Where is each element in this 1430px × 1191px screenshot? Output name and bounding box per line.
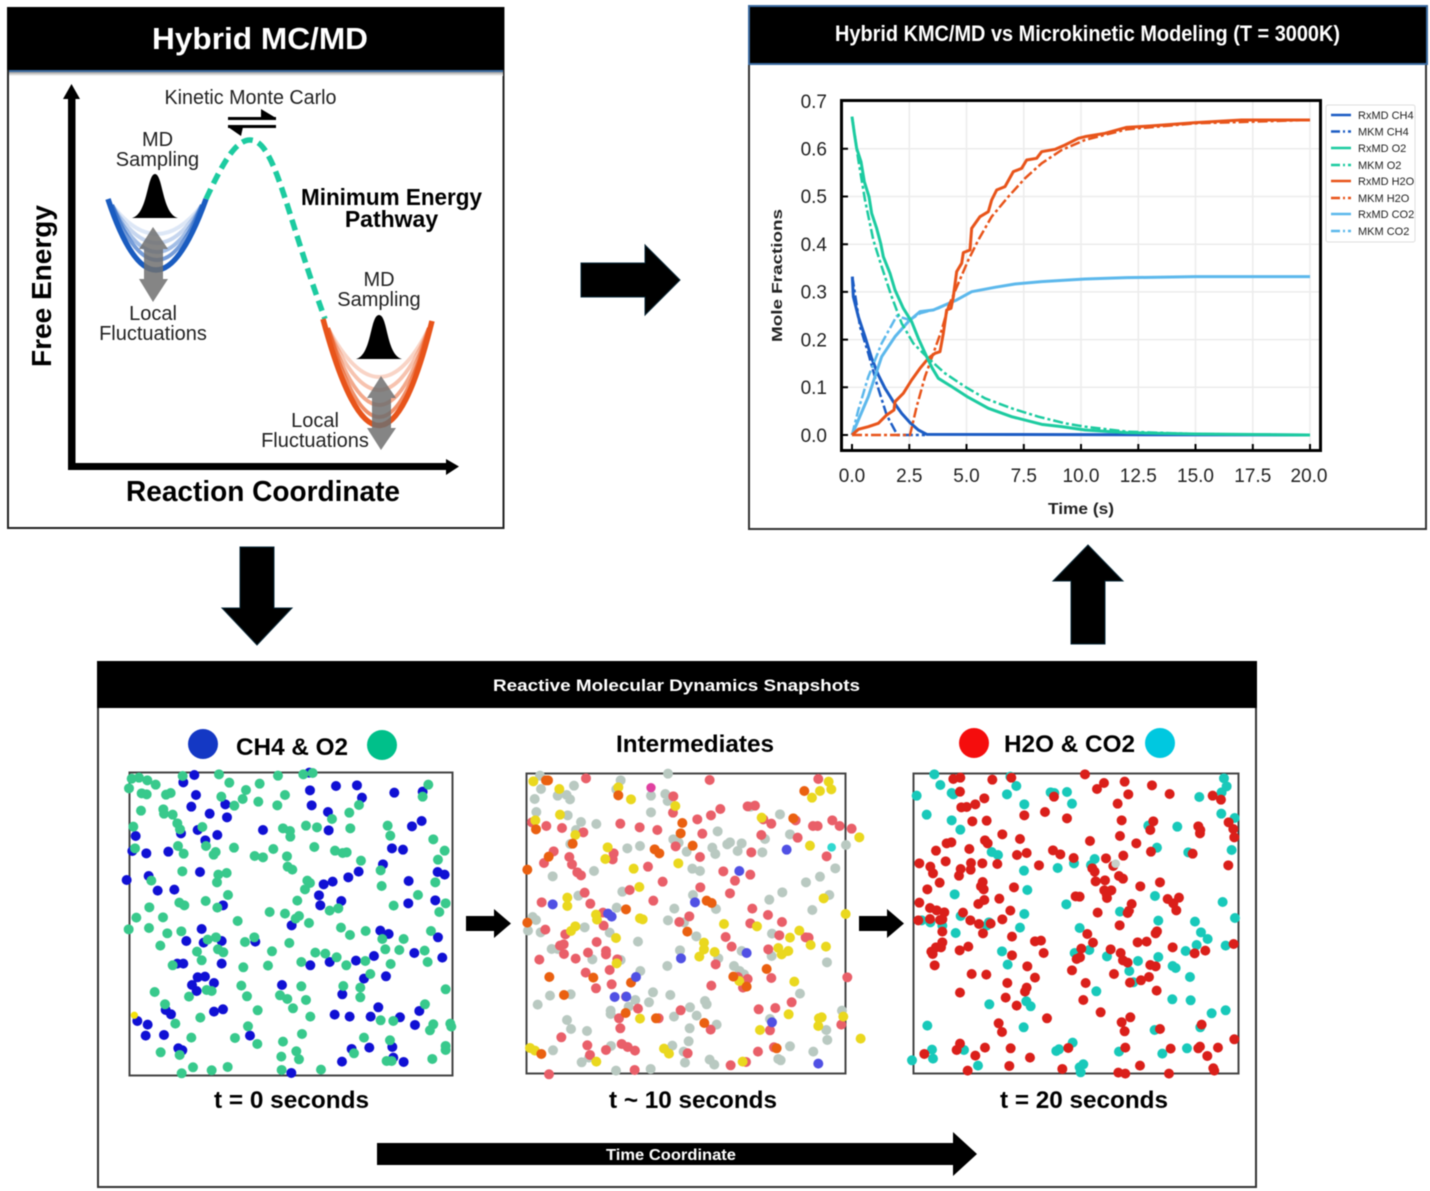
icon: MD sampling distribution right (356, 315, 402, 359)
heading bar: chart title: Hybrid KMC/MD vs Microkinetic Modeling (T = 3000K) (835, 21, 1340, 46)
chart legend: RxMD H2O (1358, 176, 1415, 188)
label: MD Sampling right (337, 269, 421, 311)
heading bar: snapshots title: Reactive Molecular Dynamics Snapshots (493, 676, 860, 695)
arrow: up to chart (1053, 545, 1123, 644)
label: MD Sampling right: MD (363, 269, 395, 291)
x-axis tick labels: 15.0 (1177, 466, 1214, 487)
label: Minimum Energy Pathway: Pathway (345, 206, 438, 232)
label: Local Fluctuations right: Fluctuations (261, 430, 369, 452)
x-axis tick labels: 2.5 (896, 466, 923, 487)
arrow: Time Coordinate (377, 1132, 977, 1176)
heading bar: Hybrid MC/MD: Hybrid MC/MD (152, 21, 368, 56)
axis label: Free Energy: Free Energy (26, 205, 57, 367)
heading bar: chart title (749, 6, 1427, 64)
y-axis tick labels: 0.4 (801, 235, 827, 256)
chart legend: MKM O2 (1358, 160, 1401, 172)
y-axis tick labels: 0.7 (801, 92, 827, 113)
arrow: down to snapshots (222, 547, 292, 645)
chart legend: RxMD O2 (1358, 143, 1406, 155)
y-axis tick labels: 0.0 (801, 426, 827, 447)
label: Local Fluctuations right (261, 410, 369, 452)
icon: gray fluctuation arrow right (367, 376, 396, 450)
legend: CH4 & O2 (188, 729, 397, 761)
x-axis tick labels: 7.5 (1011, 466, 1037, 487)
legend: H2O & CO2: H2O & CO2 (1004, 731, 1135, 758)
heading bar: Hybrid MC/MD (7, 7, 504, 70)
caption: t = 0 seconds: t = 0 seconds (214, 1087, 369, 1114)
icon: equilibrium arrows (228, 109, 276, 136)
x-axis tick labels: 5.0 (953, 466, 980, 487)
axis: free energy arrow (63, 84, 80, 470)
chart legend: RxMD CH4 (1358, 110, 1414, 122)
snapshot: t = 0 seconds, CH4 and O2 molecules (127, 772, 452, 1076)
heading: Intermediates: Intermediates (616, 731, 774, 758)
chart legend (1326, 105, 1415, 242)
x-axis tick labels: 17.5 (1234, 466, 1271, 487)
label: MD Sampling left: Sampling (116, 149, 199, 171)
y-axis tick labels: 0.2 (801, 330, 827, 352)
label: Kinetic Monte Carlo: Kinetic Monte Carlo (164, 87, 336, 109)
heading bar: snapshots title (97, 661, 1257, 708)
curve: reactant well (blue) (108, 199, 206, 270)
arrow: to chart (581, 245, 680, 315)
line chart: mole fractions vs time (769, 92, 1415, 518)
label: Local Fluctuations left (99, 303, 207, 345)
x-axis tick labels: 0.0 (839, 466, 865, 487)
icon: gray fluctuation arrow left (139, 227, 168, 302)
snapshot: t = 20 seconds, H2O and CO2 molecules (912, 774, 1238, 1074)
icon: MD sampling distribution left (132, 174, 178, 218)
label: Minimum Energy Pathway (301, 184, 482, 232)
panel: Hybrid KMC/MD vs Microkinetic Modeling (749, 6, 1427, 529)
panel: Reactive Molecular Dynamics Snapshots (97, 661, 1257, 1187)
chart legend: MKM CO2 (1358, 226, 1409, 238)
curve: product well (orange) (323, 319, 432, 426)
caption: t ~ 10 seconds: t ~ 10 seconds (609, 1087, 777, 1114)
x-axis tick labels: 20.0 (1291, 466, 1327, 487)
label: Local Fluctuations left: Local (129, 303, 177, 325)
label: Local Fluctuations left: Fluctuations (99, 323, 207, 345)
axis: reaction coordinate arrow (68, 459, 459, 475)
y-axis tick labels (801, 92, 827, 447)
x-axis tick labels: 12.5 (1120, 466, 1157, 487)
x-axis tick labels (839, 466, 1327, 487)
panel: Hybrid MC/MD (7, 7, 504, 528)
axis label: Time (s): Time (s) (1048, 501, 1114, 518)
chart legend: MKM CH4 (1358, 126, 1409, 138)
chart legend: RxMD CO2 (1358, 209, 1414, 221)
label: MD Sampling right: Sampling (337, 289, 421, 311)
axis label: Mole Fractions: Mole Fractions (769, 209, 786, 342)
label: MD Sampling left: MD (142, 129, 173, 151)
label: MD Sampling left (116, 129, 199, 171)
x-axis tick labels: 10.0 (1063, 466, 1099, 487)
legend: CH4 & O2: CH4 & O2 (236, 734, 348, 761)
y-axis tick labels: 0.5 (801, 187, 827, 208)
snapshot: t ~ 10 seconds, intermediates (526, 774, 861, 1074)
chart legend: MKM H2O (1358, 193, 1410, 205)
axis label: Reaction Coordinate: Reaction Coordinate (126, 476, 400, 508)
y-axis tick labels: 0.3 (801, 282, 827, 304)
curve: minimum energy pathway (dashed) (206, 140, 325, 319)
arrow: snapshot 2 to 3 (859, 909, 904, 938)
label: Minimum Energy Pathway: Minimum Energy (301, 184, 482, 210)
legend: H2O & CO2 (959, 728, 1175, 758)
y-axis tick labels: 0.1 (801, 378, 827, 399)
y-axis tick labels: 0.6 (801, 140, 827, 160)
arrow: Time Coordinate: Time Coordinate (606, 1147, 736, 1164)
caption: t = 20 seconds: t = 20 seconds (1000, 1087, 1168, 1114)
label: Local Fluctuations right: Local (291, 410, 339, 432)
arrow: snapshot 1 to 2 (466, 909, 511, 938)
